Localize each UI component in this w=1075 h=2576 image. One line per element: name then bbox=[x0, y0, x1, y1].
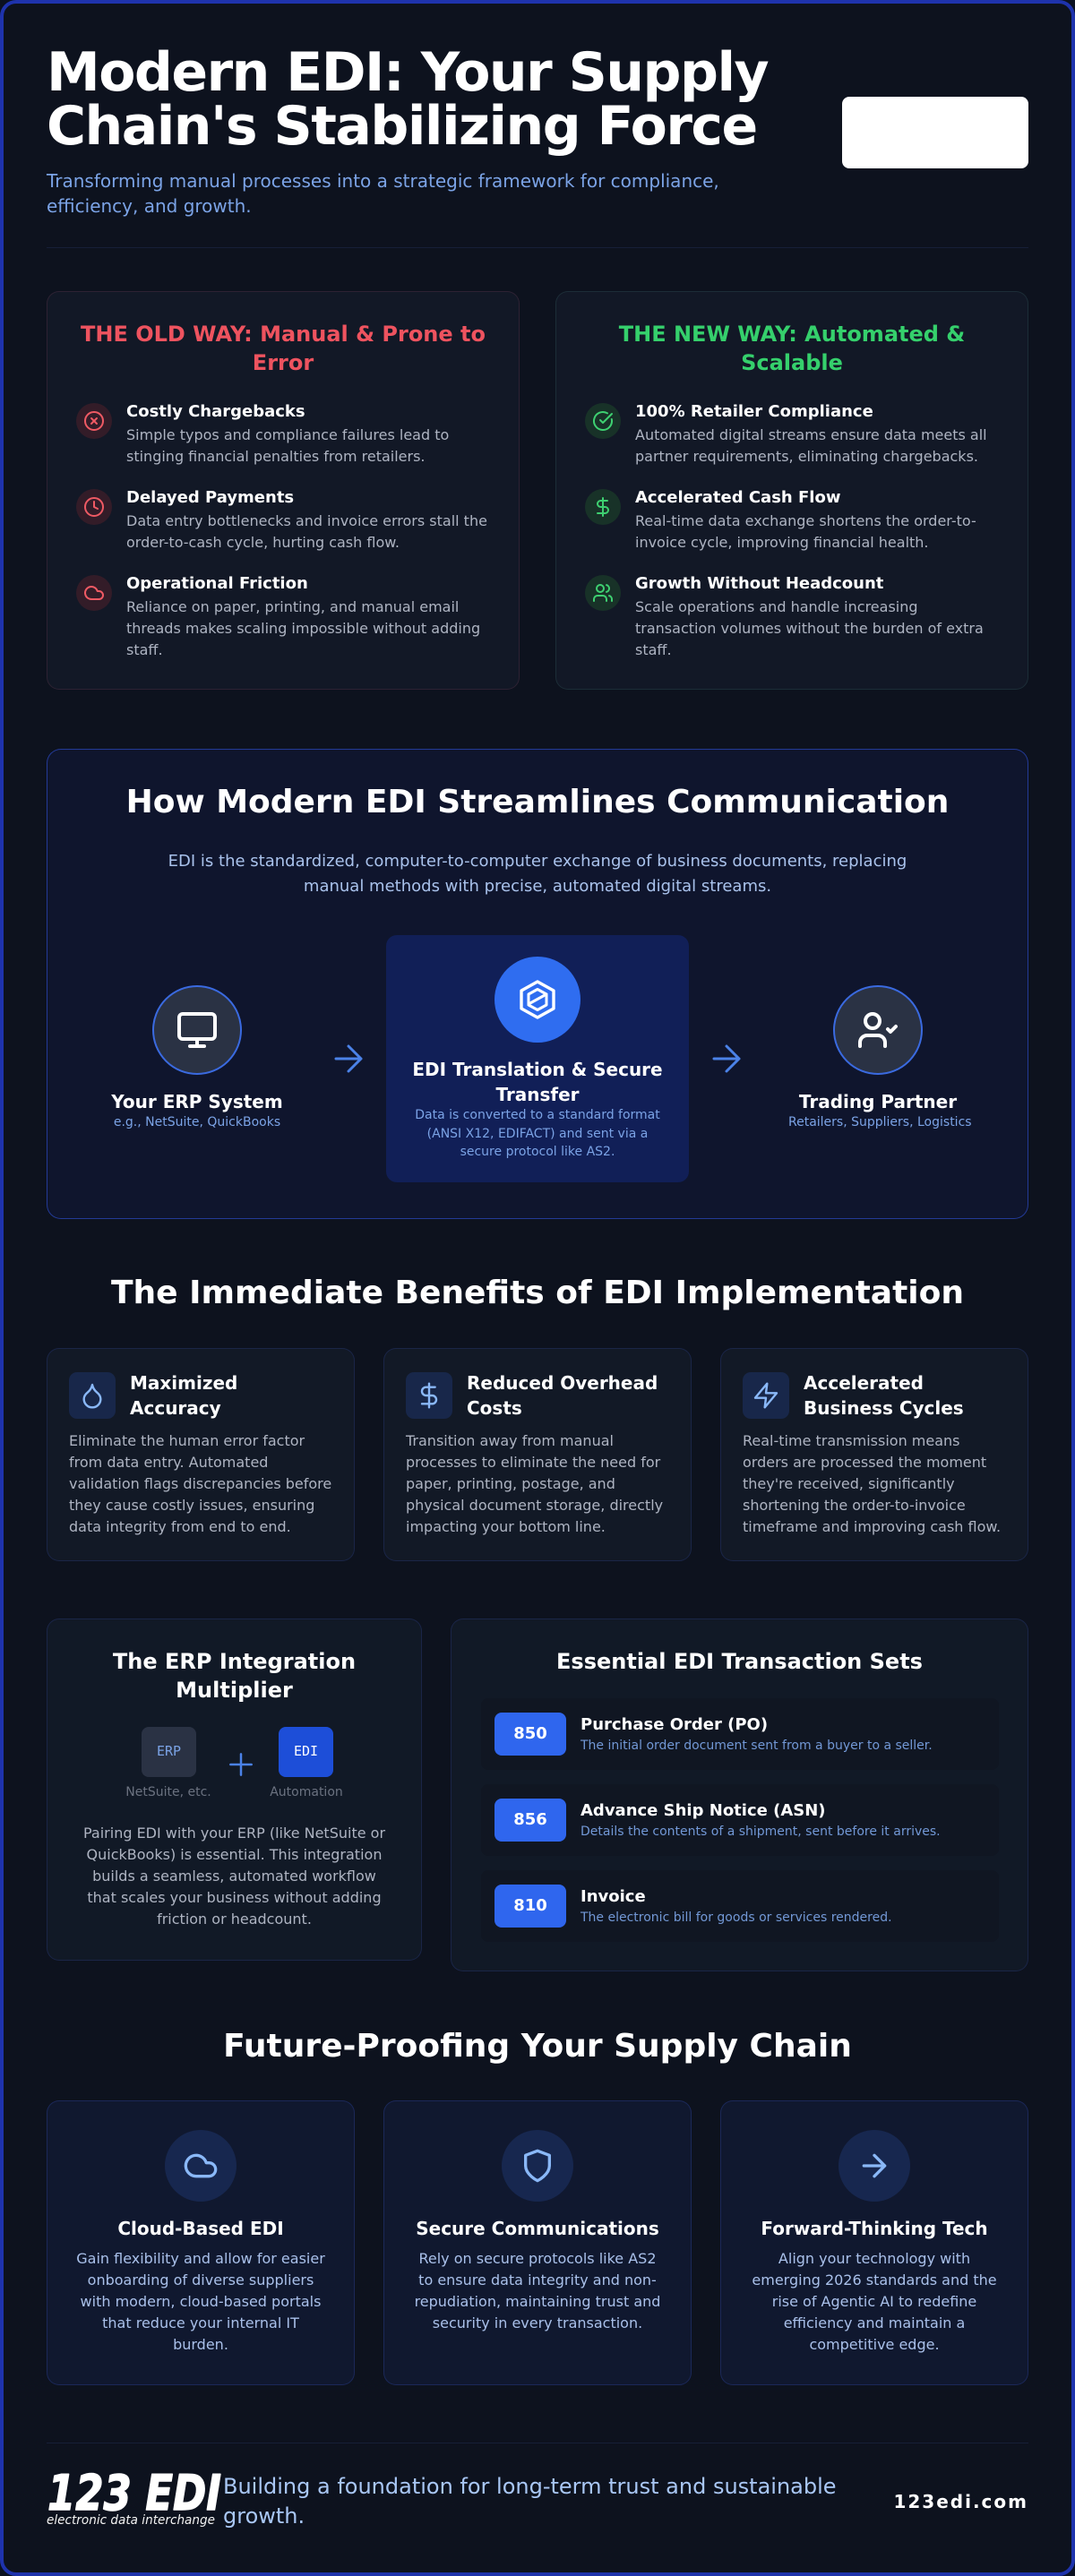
section intro bbox=[168, 852, 907, 896]
card description: orders are processed the moment bbox=[743, 1454, 986, 1471]
panel description: friction or headcount. bbox=[157, 1911, 312, 1928]
node subtitle: Retailers, Suppliers, Logistics bbox=[788, 1115, 972, 1129]
icon: monitor bbox=[152, 985, 242, 1075]
card description: Real-time transmission means bbox=[743, 1432, 960, 1449]
card description: processes to eliminate the need for bbox=[406, 1454, 660, 1471]
card description: shortening the order-to-invoice bbox=[743, 1497, 966, 1514]
panel: essential EDI transaction sets bbox=[451, 1619, 1028, 1971]
card description bbox=[405, 1432, 663, 1535]
node description: secure protocol like AS2. bbox=[460, 1145, 615, 1159]
item: operational friction bbox=[76, 574, 480, 658]
icon: user check bbox=[833, 985, 923, 1075]
panel heading bbox=[113, 1649, 356, 1703]
icon: cloud bbox=[76, 575, 112, 611]
subtitle bbox=[47, 170, 719, 217]
row description: Details the contents of a shipment, sent before it arrives. bbox=[580, 1825, 941, 1839]
tagline bbox=[223, 2474, 837, 2529]
item description bbox=[126, 598, 480, 658]
card title: Costs bbox=[467, 1397, 522, 1419]
panel heading: Essential EDI Transaction Sets bbox=[556, 1649, 923, 1674]
card description: security in every transaction. bbox=[433, 2314, 642, 2331]
item description: partner requirements, eliminating chargebacks. bbox=[635, 448, 978, 465]
card: secure communications bbox=[383, 2100, 692, 2385]
arrow bbox=[713, 1044, 741, 1073]
card description: competitive edge. bbox=[809, 2336, 940, 2353]
row description: The initial order document sent from a buyer to a seller. bbox=[580, 1739, 933, 1753]
item title: 100% Retailer Compliance bbox=[635, 402, 873, 421]
card description: to ensure data integrity and non- bbox=[418, 2271, 657, 2288]
item description: threads makes scaling impossible without adding bbox=[126, 620, 480, 637]
panel: how modern EDI streamlines communication bbox=[47, 749, 1028, 1219]
tagline: Building a foundation for long-term trust and sustainable bbox=[223, 2474, 837, 2499]
card title: Secure Communications bbox=[416, 2218, 659, 2239]
subtitle: Transforming manual processes into a strategic framework for compliance, bbox=[47, 170, 719, 192]
heading: immediate benefits: The Immediate Benefits of EDI Implementation bbox=[111, 1275, 964, 1311]
icon: lightning bbox=[743, 1372, 789, 1419]
card description: with modern, cloud-based portals bbox=[81, 2293, 321, 2310]
card description: physical document storage, directly bbox=[406, 1497, 663, 1514]
card title: Accelerated bbox=[804, 1372, 924, 1394]
item description: staff. bbox=[635, 641, 672, 658]
panel: ERP integration multiplier bbox=[47, 1619, 422, 1961]
icon: droplet bbox=[69, 1372, 116, 1419]
item: costly chargebacks bbox=[76, 402, 449, 465]
item description: Real-time data exchange shortens the order-to- bbox=[635, 512, 976, 529]
card description: emerging 2026 standards and the bbox=[752, 2271, 997, 2288]
badge 850 bbox=[494, 1713, 566, 1756]
item description: Reliance on paper, printing, and manual email bbox=[126, 598, 459, 615]
arrow bbox=[335, 1044, 363, 1073]
item: growth without headcount bbox=[585, 574, 984, 658]
card description: data integrity from end to end. bbox=[69, 1518, 291, 1535]
node subtitle: e.g., NetSuite, QuickBooks bbox=[114, 1115, 280, 1129]
item description bbox=[635, 512, 976, 551]
ERP tile: ERP bbox=[157, 1743, 181, 1759]
card description: Transition away from manual bbox=[406, 1432, 614, 1449]
card: cloud-based EDI bbox=[47, 2100, 355, 2385]
icon: hexagon logo bbox=[494, 957, 580, 1043]
panel description: Pairing EDI with your ERP (like NetSuite or bbox=[83, 1825, 385, 1842]
badge 810 bbox=[494, 1885, 566, 1928]
card description: Eliminate the human error factor bbox=[69, 1432, 305, 1449]
row title: Purchase Order (PO) bbox=[580, 1715, 768, 1734]
website: 123edi.com bbox=[893, 2491, 1028, 2512]
icon: check circle bbox=[585, 403, 621, 439]
card description: timeframe and improving cash flow. bbox=[743, 1518, 1001, 1535]
item description bbox=[126, 512, 487, 551]
card: accelerated business cycles bbox=[720, 1348, 1028, 1561]
ERP tile bbox=[142, 1727, 196, 1777]
card description bbox=[76, 2250, 325, 2353]
new way heading bbox=[618, 322, 965, 375]
panel: the old way bbox=[47, 291, 520, 690]
row description: The electronic bill for goods or services rendered. bbox=[580, 1911, 892, 1925]
item title: Operational Friction bbox=[126, 574, 308, 593]
panel: the new way bbox=[555, 291, 1028, 690]
card: maximized accuracy bbox=[47, 1348, 355, 1561]
item description: stinging financial penalties from retailers. bbox=[126, 448, 425, 465]
icon: dollar bbox=[406, 1372, 452, 1419]
old way heading bbox=[81, 322, 486, 375]
new way heading: Scalable bbox=[741, 350, 843, 375]
EDI tile: EDI bbox=[294, 1743, 318, 1759]
ERP caption: NetSuite, etc. bbox=[125, 1785, 211, 1799]
subtitle: efficiency, and growth. bbox=[47, 195, 252, 217]
card description bbox=[69, 1432, 331, 1535]
logo placeholder bbox=[842, 97, 1028, 168]
card description: burden. bbox=[173, 2336, 228, 2353]
badge 856 bbox=[494, 1799, 566, 1842]
panel description: builds a seamless, automated workflow bbox=[92, 1868, 376, 1885]
card: forward-thinking tech bbox=[720, 2100, 1028, 2385]
item: delayed payments bbox=[76, 488, 487, 551]
node title: Transfer bbox=[495, 1084, 580, 1105]
title: Modern EDI: Your Supply bbox=[47, 41, 768, 104]
item description: Scale operations and handle increasing bbox=[635, 598, 918, 615]
card title: Cloud-Based EDI bbox=[117, 2218, 284, 2239]
card title bbox=[130, 1372, 237, 1419]
panel heading: Multiplier bbox=[176, 1678, 293, 1703]
tagline: growth. bbox=[223, 2503, 305, 2529]
icon: x circle bbox=[76, 403, 112, 439]
item title: Delayed Payments bbox=[126, 488, 294, 507]
badge 810: 810 bbox=[513, 1896, 547, 1915]
card description: Gain flexibility and allow for easier bbox=[76, 2250, 325, 2267]
panel description bbox=[83, 1825, 385, 1928]
card title: Accuracy bbox=[130, 1397, 221, 1419]
icon: cloud bbox=[165, 2130, 236, 2202]
old way heading: Error bbox=[253, 350, 314, 375]
item description: invoice cycle, improving financial health. bbox=[635, 534, 929, 551]
EDI tile bbox=[279, 1727, 333, 1777]
footer bbox=[47, 2470, 1028, 2529]
old way heading: THE OLD WAY: Manual & Prone to bbox=[81, 322, 486, 347]
item description: Data entry bottlenecks and invoice errors stall the bbox=[126, 512, 487, 529]
item description: staff. bbox=[126, 641, 163, 658]
badge 856: 856 bbox=[513, 1810, 547, 1829]
title: Chain's Stabilizing Force bbox=[47, 95, 757, 158]
node title: Your ERP System bbox=[111, 1091, 283, 1112]
section intro: manual methods with precise, automated digital streams. bbox=[304, 877, 771, 896]
card title bbox=[467, 1372, 658, 1419]
card description: paper, printing, postage, and bbox=[406, 1475, 615, 1492]
card title: Business Cycles bbox=[804, 1397, 964, 1419]
item: retailer compliance bbox=[585, 402, 987, 465]
item description: Automated digital streams ensure data meets all bbox=[635, 426, 987, 443]
card description: Rely on secure protocols like AS2 bbox=[418, 2250, 656, 2267]
card description: they cause costly issues, ensuring bbox=[69, 1497, 314, 1514]
icon: dollar bbox=[585, 489, 621, 525]
row: 810 bbox=[481, 1870, 999, 1942]
title bbox=[47, 41, 769, 158]
item description bbox=[635, 598, 984, 658]
card description bbox=[743, 1432, 1001, 1535]
card description: efficiency and maintain a bbox=[784, 2314, 965, 2331]
card description bbox=[752, 2250, 997, 2353]
card title: Reduced Overhead bbox=[467, 1372, 658, 1394]
node title bbox=[412, 1059, 663, 1105]
plus sign bbox=[229, 1753, 253, 1776]
node title: EDI Translation & Secure bbox=[412, 1059, 663, 1080]
row: 856 bbox=[481, 1784, 999, 1856]
panel heading: The ERP Integration bbox=[113, 1649, 356, 1674]
item description: order-to-cash cycle, hurting cash flow. bbox=[126, 534, 400, 551]
node: your ERP system bbox=[111, 985, 283, 1129]
panel description: QuickBooks) is essential. This integration bbox=[87, 1846, 382, 1863]
card description bbox=[415, 2250, 660, 2331]
item title: Growth Without Headcount bbox=[635, 574, 883, 593]
card description: validation flags discrepancies before bbox=[69, 1475, 331, 1492]
row title: Advance Ship Notice (ASN) bbox=[580, 1801, 826, 1820]
node description: (ANSI X12, EDIFACT) and sent via a bbox=[427, 1127, 648, 1141]
new way heading: THE NEW WAY: Automated & bbox=[619, 322, 965, 347]
card description: that reduce your internal IT bbox=[102, 2314, 299, 2331]
item: accelerated cash flow bbox=[585, 488, 976, 551]
item description bbox=[126, 426, 449, 465]
item description: transaction volumes without the burden of extra bbox=[635, 620, 984, 637]
card description: impacting your bottom line. bbox=[406, 1518, 606, 1535]
logo: 123 EDI: electronic data interchange bbox=[47, 2513, 215, 2528]
card title: Maximized bbox=[130, 1372, 237, 1394]
card description: Align your technology with bbox=[778, 2250, 970, 2267]
EDI caption: Automation bbox=[270, 1785, 343, 1799]
card description: rise of Agentic AI to redefine bbox=[772, 2293, 976, 2310]
row title: Invoice bbox=[580, 1887, 646, 1906]
card description: repudiation, maintaining trust and bbox=[415, 2293, 660, 2310]
node description: Data is converted to a standard format bbox=[415, 1108, 660, 1122]
heading: future-proofing: Future-Proofing Your Supply Chain bbox=[223, 2028, 852, 2065]
icon: arrow right bbox=[838, 2130, 910, 2202]
node title: Trading Partner bbox=[799, 1091, 957, 1112]
node: EDI translation bbox=[386, 935, 689, 1182]
node description bbox=[415, 1108, 660, 1159]
icon: users bbox=[585, 575, 621, 611]
section intro: EDI is the standardized, computer-to-computer exchange of business documents, replacing bbox=[168, 852, 907, 871]
item description: Simple typos and compliance failures lead to bbox=[126, 426, 449, 443]
badge 850: 850 bbox=[513, 1724, 547, 1743]
node: trading partner bbox=[788, 985, 972, 1129]
icon: shield bbox=[502, 2130, 573, 2202]
card description: onboarding of diverse suppliers bbox=[88, 2271, 314, 2288]
section heading: How Modern EDI Streamlines Communication bbox=[126, 784, 949, 820]
icon: clock bbox=[76, 489, 112, 525]
item title: Accelerated Cash Flow bbox=[635, 488, 840, 507]
card title: Forward-Thinking Tech bbox=[761, 2218, 988, 2239]
card description: from data entry. Automated bbox=[69, 1454, 268, 1471]
card title bbox=[804, 1372, 964, 1419]
item description bbox=[635, 426, 987, 465]
header bbox=[47, 41, 1028, 217]
card: reduced overhead costs bbox=[383, 1348, 692, 1561]
item title: Costly Chargebacks bbox=[126, 402, 305, 421]
row: 850 bbox=[481, 1698, 999, 1770]
panel description: that scales your business without adding bbox=[87, 1889, 382, 1906]
card description: they're received, significantly bbox=[743, 1475, 955, 1492]
